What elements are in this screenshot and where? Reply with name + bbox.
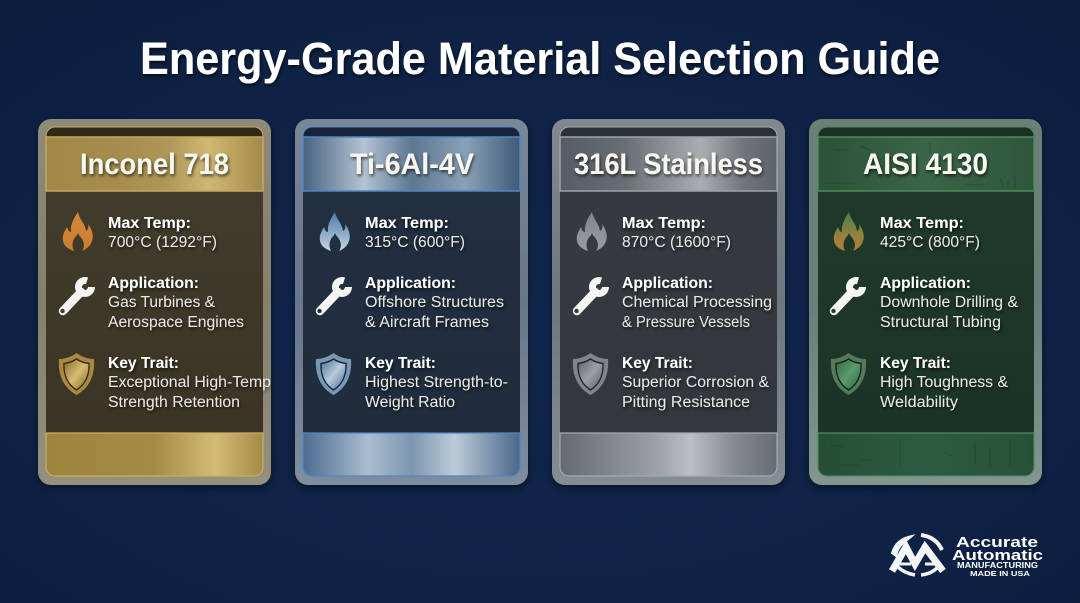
panel: Ti-6Al-4V: [295, 119, 528, 485]
text: application: & Pressure Vessels: [622, 314, 750, 331]
text: application: [880, 275, 1019, 331]
text: application: Application:: [365, 275, 456, 292]
heading: Inconel 718: [46, 137, 263, 191]
icon: flame: [834, 212, 864, 251]
text: key trait: [622, 355, 770, 411]
text: key trait: Weldability: [880, 394, 958, 411]
icon: wrench: [60, 280, 92, 313]
text: key trait: [108, 355, 271, 411]
text: max temp: 425°C (800°F): [880, 234, 980, 251]
text: application: Gas Turbines &: [108, 294, 216, 311]
logo: Accurate Automatic: MANUFACTURING: [957, 561, 1038, 570]
text: application: Application:: [622, 275, 713, 292]
text: application: & Aircraft Frames: [365, 314, 489, 331]
text: key trait: [880, 355, 1009, 411]
text: application: Application:: [880, 275, 971, 292]
icon: flame: [577, 212, 607, 251]
text: max temp: Max Temp:: [365, 215, 449, 232]
logo mark: [892, 535, 943, 575]
text: max temp: [365, 215, 465, 251]
panel: Inconel 718: [38, 119, 271, 485]
text: max temp: 315°C (600°F): [365, 234, 465, 251]
text: max temp: [622, 215, 731, 251]
text: application: Chemical Processing: [622, 294, 772, 311]
icon: shield: [59, 353, 94, 395]
icon: wrench: [574, 280, 606, 313]
panel: 316L Stainless: [552, 119, 785, 485]
text: application: Structural Tubing: [880, 314, 1001, 331]
logo: Accurate Automatic: [892, 534, 1043, 578]
footer plate: [46, 433, 263, 476]
text: key trait: Superior Corrosion &: [622, 374, 770, 391]
text: max temp: [108, 215, 217, 251]
logo: Accurate Automatic: Automatic: [952, 547, 1043, 564]
text: application: [108, 275, 244, 331]
text: key trait: High Toughness &: [880, 374, 1009, 391]
icon: wrench: [831, 280, 862, 313]
text: application: [365, 275, 504, 331]
text: key trait: Exceptional High-Temp: [108, 374, 271, 391]
text: max temp: Max Temp:: [108, 215, 191, 232]
icon: shield: [831, 353, 866, 395]
panel: AISI 4130: [809, 119, 1042, 485]
text: key trait: Highest Strength-to-: [365, 374, 508, 391]
footer plate: [560, 433, 777, 476]
text: max temp: 700°C (1292°F): [108, 234, 217, 251]
heading: Ti-6Al-4V: [303, 137, 520, 191]
heading: Ti-6Al-4V: Ti-6Al-4V: [350, 148, 474, 181]
title: Energy-Grade Material Selection Guide: [140, 33, 940, 84]
text: max temp: 870°C (1600°F): [622, 234, 731, 251]
icon: shield: [316, 353, 351, 395]
footer plate: [818, 433, 1034, 476]
text: key trait: Key Trait:: [622, 355, 693, 372]
icon: flame: [63, 212, 93, 251]
icon: wrench: [317, 280, 348, 313]
text: max temp: [880, 215, 980, 251]
text: application: Application:: [108, 275, 199, 292]
footer plate: [303, 433, 520, 476]
text: application: Aerospace Engines: [108, 314, 244, 331]
text: max temp: Max Temp:: [622, 215, 706, 232]
text: key trait: Strength Retention: [108, 394, 240, 411]
text: key trait: Weight Ratio: [365, 394, 455, 411]
heading: AISI 4130: [818, 137, 1034, 191]
icon: shield: [573, 353, 608, 395]
heading: 316L Stainless: [560, 137, 777, 191]
text: application: [622, 275, 772, 331]
text: key trait: Key Trait:: [880, 355, 951, 372]
logo: Accurate Automatic: Accurate: [956, 534, 1038, 551]
logo: Accurate Automatic: MADE IN USA: [970, 569, 1031, 578]
text: max temp: Max Temp:: [880, 215, 964, 232]
text: key trait: Pitting Resistance: [622, 394, 750, 411]
text: key trait: Key Trait:: [108, 355, 179, 372]
text: key trait: [365, 355, 508, 411]
text: application: Downhole Drilling &: [880, 294, 1019, 311]
heading: 316L Stainless: 316L Stainless: [574, 148, 763, 181]
heading: Inconel 718: Inconel 718: [80, 148, 229, 181]
icon: flame: [320, 212, 350, 251]
heading: AISI 4130: AISI 4130: [863, 148, 988, 181]
text: application: Offshore Structures: [365, 294, 504, 311]
text: key trait: Key Trait:: [365, 355, 436, 372]
